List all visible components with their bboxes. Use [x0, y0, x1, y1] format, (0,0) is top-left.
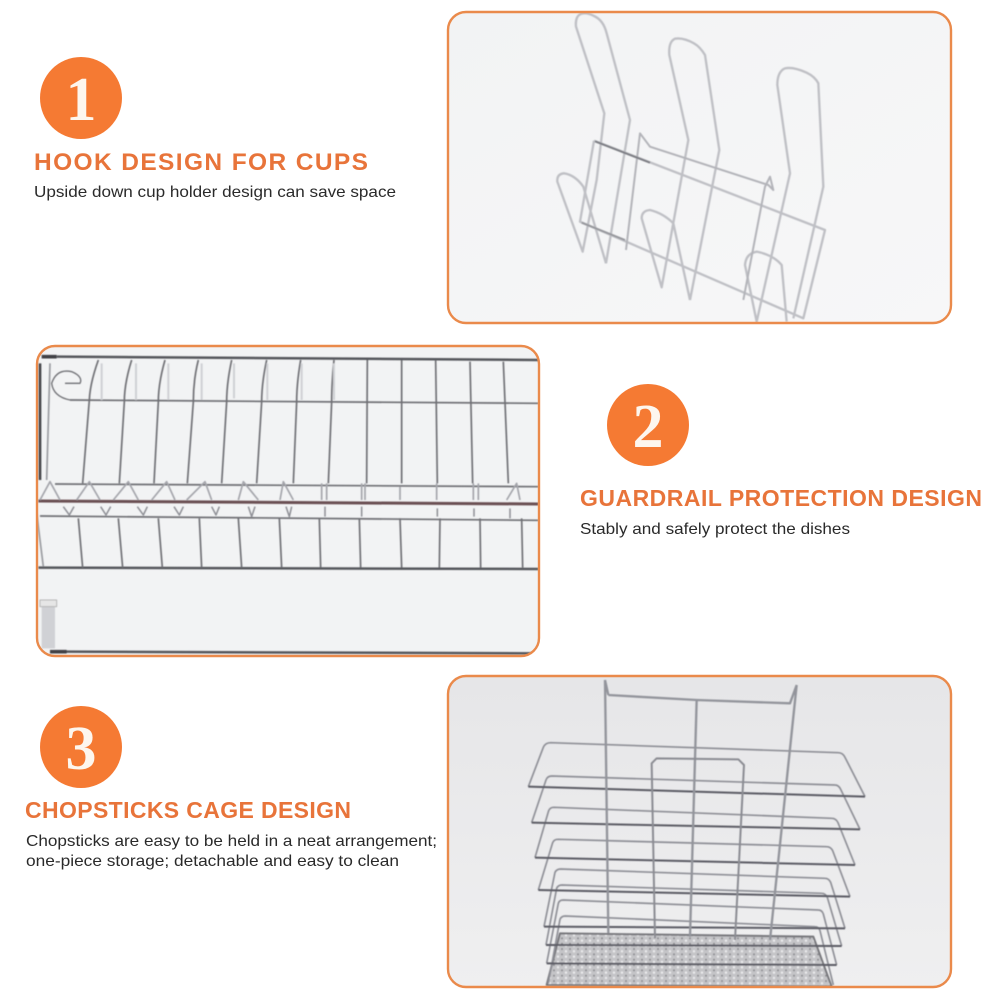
badge number 3: 3 — [66, 715, 96, 783]
badge number 1: 1 — [66, 66, 96, 134]
description: chopsticks: one-piece storage; detachable and easy to clean — [26, 853, 399, 870]
heading: hook design: HOOK DESIGN FOR CUPS — [34, 149, 368, 176]
badge number 3 — [40, 706, 122, 788]
heading: chopsticks: CHOPSTICKS CAGE DESIGN — [25, 797, 351, 823]
wire cup hooks — [557, 13, 825, 322]
description: guardrail: Stably and safely protect the dishes — [580, 521, 850, 538]
description: hook design: Upside down cup holder design can save space — [34, 184, 396, 201]
panel 1: hook design text block — [34, 57, 396, 201]
photo panel: cup hook rack — [448, 12, 951, 323]
panel 3: chopsticks text block — [25, 706, 437, 870]
badge number 2 — [607, 384, 689, 466]
panel 2: guardrail text block — [580, 384, 982, 538]
panel border — [448, 12, 951, 323]
description: chopsticks: Chopsticks are easy to be held in a neat arrangement; — [26, 833, 437, 850]
photo panel: chopsticks cage — [448, 676, 951, 987]
panel border — [37, 346, 539, 656]
mesh bottom — [547, 933, 832, 987]
wire chopsticks basket — [528, 680, 865, 987]
photo panel: guardrail rack — [37, 346, 539, 656]
badge number 2: 2 — [632, 393, 664, 461]
heading: guardrail: GUARDRAIL PROTECTION DESIGN — [580, 485, 982, 511]
description: chopsticks — [26, 833, 437, 870]
panel border — [448, 676, 951, 987]
badge number 1 — [40, 57, 122, 139]
dish rack wires — [37, 357, 538, 653]
